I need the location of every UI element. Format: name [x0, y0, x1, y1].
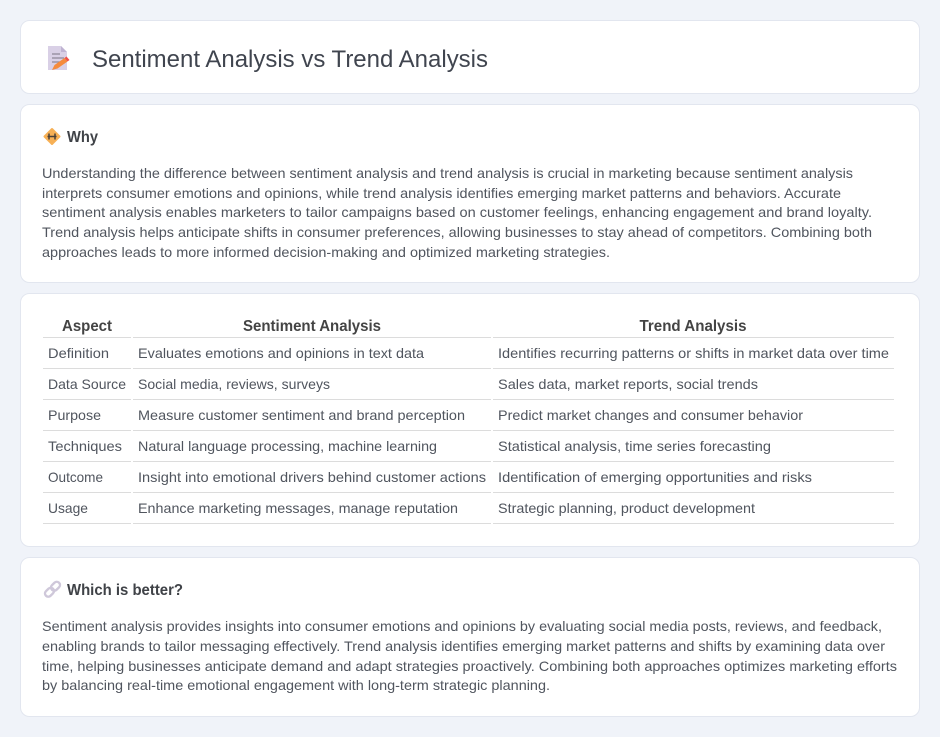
row: definition [48, 345, 889, 361]
text block: which is better: time, helping businesses anticipate demand and adapt strategies proactively. Combining both approaches optimizes marketing efforts [42, 658, 897, 674]
row: purpose [48, 407, 803, 423]
icon: document with pencil [48, 46, 70, 70]
icon: warning diamond [44, 129, 60, 144]
row: techniques: Statistical analysis, time series forecasting [498, 438, 771, 454]
text block: which is better: enabling brands to tailor messaging effectively. Trend analysis identifies emerging market patterns and shifts by examining data over [42, 638, 885, 654]
row: data source [48, 376, 758, 392]
text block: why: Trend analysis helps anticipate shifts in consumer preferences, allowing businesses to stay ahead of competitors. Combining both [42, 224, 872, 240]
icon: chain link [44, 580, 61, 598]
table header: Trend Analysis [640, 318, 746, 335]
row: definition: Definition [48, 345, 109, 361]
row: techniques [48, 438, 771, 454]
panel: comparison table [20, 294, 920, 546]
row: usage [48, 500, 755, 516]
panel: why [20, 104, 920, 282]
row: usage: Strategic planning, product development [498, 500, 755, 516]
title: Sentiment Analysis vs Trend Analysis [92, 46, 488, 73]
row: definition: Identifies recurring patterns or shifts in market data over time [498, 345, 889, 361]
text block: which is better: by balancing real-time emotional engagement with long-term strategic planning. [42, 677, 550, 693]
table header [62, 318, 746, 335]
text block: why: Understanding the difference between sentiment analysis and trend analysis is crucial in marketing because sentiment analysis [42, 165, 853, 181]
panel: which is better [20, 558, 920, 716]
row: outcome: Insight into emotional drivers behind customer actions [138, 469, 486, 485]
row: outcome: Outcome [48, 469, 103, 485]
row: data source: Data Source [48, 376, 126, 392]
heading: why: Why [67, 129, 98, 146]
row: techniques: Techniques [48, 438, 122, 454]
row: data source: Sales data, market reports, social trends [498, 376, 758, 392]
text block: which is better [42, 618, 897, 693]
text block: which is better: Sentiment analysis provides insights into consumer emotions and opinions by evaluating social media posts, reviews, and feedback, [42, 618, 882, 634]
row: purpose: Predict market changes and consumer behavior [498, 407, 803, 423]
row: usage: Enhance marketing messages, manage reputation [138, 500, 458, 516]
heading: which is better: Which is better? [67, 582, 183, 599]
text block: why: interprets consumer emotions and opinions, while trend analysis identifies emerging market patterns and behaviors. Accurate [42, 185, 841, 201]
text block: why: sentiment analysis enables marketers to tailor campaigns based on customer feelings, enhancing engagement and brand loyalty. [42, 204, 872, 220]
row: purpose: Purpose [48, 407, 101, 423]
text block: why [42, 165, 872, 260]
panel: header [20, 20, 920, 94]
table header: Sentiment Analysis [243, 318, 381, 335]
row: techniques: Natural language processing, machine learning [138, 438, 437, 454]
row: data source: Social media, reviews, surveys [138, 376, 330, 392]
table header: Aspect [62, 318, 112, 335]
text block: why: approaches leads to more informed decision-making and optimized marketing strategies. [42, 244, 610, 260]
row: usage: Usage [48, 500, 88, 516]
row: definition: Evaluates emotions and opinions in text data [138, 345, 424, 361]
row: outcome [48, 469, 812, 485]
row: purpose: Measure customer sentiment and brand perception [138, 407, 465, 423]
row: outcome: Identification of emerging opportunities and risks [498, 469, 812, 485]
